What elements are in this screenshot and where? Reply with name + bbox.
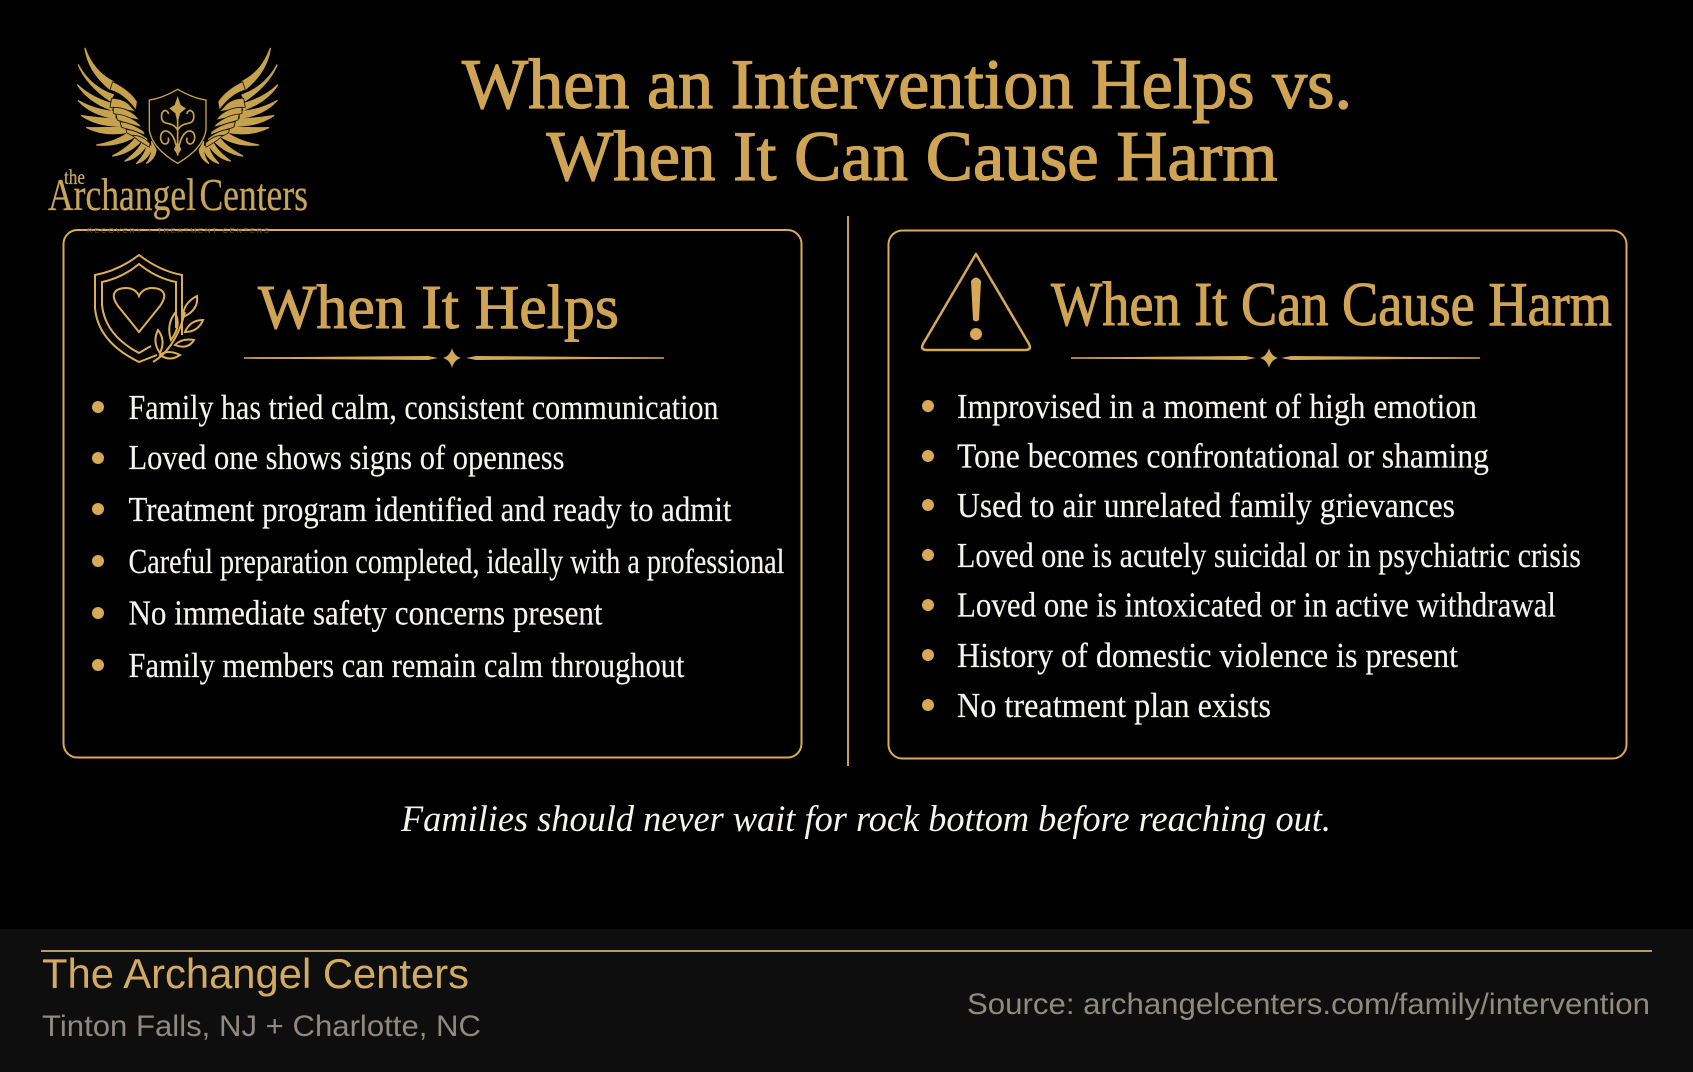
footer xyxy=(0,929,1693,1072)
logo wordmark: Archangel Centers xyxy=(48,169,308,220)
divider xyxy=(847,216,849,766)
heading ornament xyxy=(1071,348,1480,368)
footer locations: Tinton Falls, NJ + Charlotte, NC xyxy=(42,1010,481,1043)
footer organisation name: The Archangel Centers xyxy=(42,950,469,997)
logo wordmark: the xyxy=(64,165,85,189)
list: when it helps xyxy=(92,388,785,685)
list: when it helps: Treatment program identified and ready to admit xyxy=(128,490,732,529)
logo tagline overlapping panel edge: RECOVERY + TREATMENT CENTERS xyxy=(87,226,269,235)
heading ornament xyxy=(244,348,664,368)
list: when it can cause harm: Used to air unrelated family grievances xyxy=(957,486,1455,525)
footer source: Source: archangelcenters.com/family/intervention xyxy=(967,988,1650,1021)
icon: shield with heart and leaves xyxy=(95,255,203,362)
title: When It Can Cause Harm xyxy=(546,118,1278,196)
panel: when it helps xyxy=(64,226,802,758)
list: when it helps: Careful preparation completed, ideally with a professional xyxy=(128,542,785,581)
list: when it can cause harm: Improvised in a moment of high emotion xyxy=(957,387,1477,426)
list: when it can cause harm: Tone becomes confrontational or shaming xyxy=(957,436,1489,476)
list: when it helps: Loved one shows signs of openness xyxy=(128,438,564,477)
list: when it can cause harm: No treatment plan exists xyxy=(957,686,1271,725)
list: when it helps: Family has tried calm, consistent communication xyxy=(128,388,718,427)
list: when it helps: Family members can remain calm throughout xyxy=(128,646,685,685)
heading: when it can cause harm: When It Can Cause Harm xyxy=(1051,271,1612,339)
icon: warning triangle xyxy=(922,254,1030,350)
list: when it can cause harm: History of domestic violence is present xyxy=(957,636,1458,675)
icon: wings and shield xyxy=(78,48,278,163)
list: when it can cause harm: Loved one is acutely suicidal or in psychiatric crisis xyxy=(957,536,1581,575)
heading: when it helps: When It Helps xyxy=(258,274,619,342)
list: when it helps: No immediate safety concerns present xyxy=(128,594,603,632)
list: when it can cause harm: Loved one is intoxicated or in active withdrawal xyxy=(957,586,1556,624)
tagline: Families should never wait for rock bottom before reaching out. xyxy=(400,799,1331,840)
logo: The Archangel Centers xyxy=(48,48,308,220)
title: When an Intervention Helps vs. xyxy=(462,46,1352,124)
panel: when it can cause harm xyxy=(888,230,1626,758)
list: when it can cause harm xyxy=(922,387,1581,725)
title xyxy=(462,46,1352,196)
